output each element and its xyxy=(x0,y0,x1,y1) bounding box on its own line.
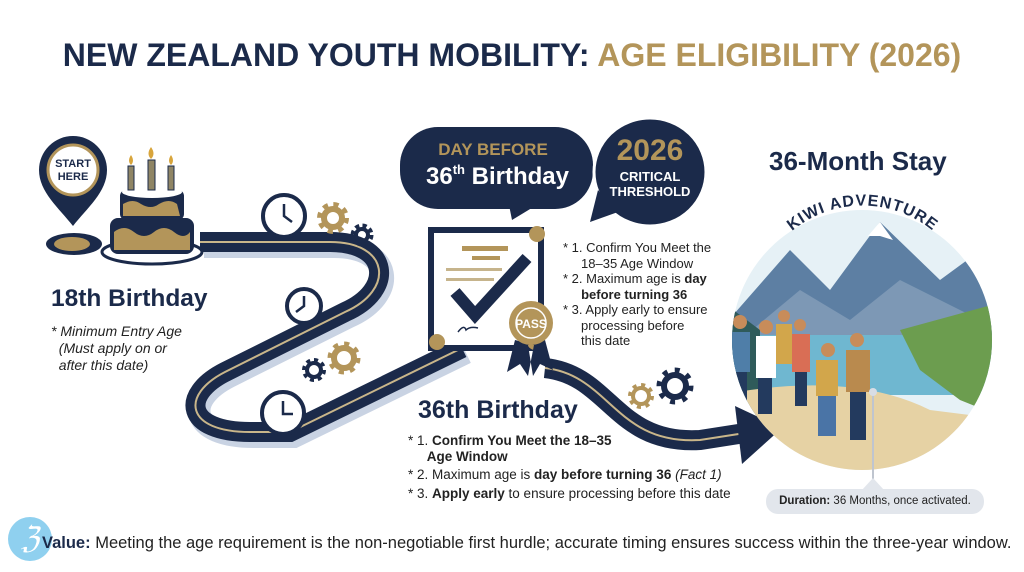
heading: 18th birthday: 18th Birthday xyxy=(51,285,208,312)
callout: day before 36th: 36 xyxy=(426,163,453,190)
text block: minimum entry age xyxy=(51,323,182,373)
text block: right of certificate: * 1. Confirm You Meet the xyxy=(563,240,711,255)
road and icons illustration xyxy=(39,120,992,489)
icon: certificate xyxy=(429,226,553,376)
icon: cake xyxy=(102,147,202,264)
icon: certificate: PASS xyxy=(515,317,547,331)
text block: 36th birthday facts: Age Window xyxy=(427,448,508,464)
callout: 2026 critical threshold: 2026 xyxy=(617,134,683,167)
heading: 36-month stay: 36-Month Stay xyxy=(769,146,947,176)
text block: right of certificate: 18–35 Age Window xyxy=(581,256,693,270)
text block: right of certificate: * 3. Apply early to ensure xyxy=(563,302,708,317)
callout: day before 36th: th xyxy=(453,162,465,177)
callout: day before 36th: DAY BEFORE xyxy=(438,140,548,159)
text block: minimum entry age: * Minimum Entry Age xyxy=(51,323,182,339)
text block: minimum entry age: (Must apply on or xyxy=(59,340,167,356)
callout: day before 36th: Birthday xyxy=(465,163,570,190)
text block: right of certificate: before turning 36 xyxy=(581,286,687,302)
scene: kiwi adventure circle xyxy=(732,194,992,489)
icon: logo xyxy=(8,517,52,561)
icon: start pin xyxy=(39,136,107,255)
text block: right of certificate: this date xyxy=(581,333,630,348)
text block: minimum entry age: after this date) xyxy=(59,357,148,373)
callout: 2026 critical threshold: CRITICAL xyxy=(620,169,680,184)
text block: 36th birthday facts: * 3. Apply early to ensure processing before this date xyxy=(408,486,731,500)
callout: 2026 critical threshold: THRESHOLD xyxy=(610,184,690,199)
road: main xyxy=(195,242,466,437)
footer value statement: Value: Meeting the age requirement is the non-negotiable first hurdle; accurate timing ensures success within the three-year window. xyxy=(42,534,1011,552)
text block: 36th birthday facts xyxy=(408,433,731,501)
callout: duration: Duration: 36 Months, once activated. xyxy=(779,495,971,507)
text block: 36th birthday facts: * 1. Confirm You Meet the 18–35 xyxy=(408,433,612,448)
text block: right of certificate: processing before xyxy=(581,318,684,332)
title: NEW ZEALAND YOUTH MOBILITY: AGE ELIGIBILITY (2026) xyxy=(63,37,961,73)
icon: start pin: START xyxy=(55,158,91,170)
callout: 2026 critical threshold xyxy=(590,118,706,226)
text block: right of certificate xyxy=(563,240,711,348)
scene: kiwi adventure circle: KIWI ADVENTURE xyxy=(786,194,938,230)
callout: duration xyxy=(766,489,984,514)
heading: 36th birthday: 36th Birthday xyxy=(418,396,578,424)
icon: clocks xyxy=(262,195,321,434)
icon: gears xyxy=(304,205,691,407)
text block: right of certificate: * 2. Maximum age is day xyxy=(563,271,707,286)
icon: logo: ℨ xyxy=(21,522,39,555)
icon: start pin: HERE xyxy=(58,171,88,183)
callout: day before 36th xyxy=(400,127,593,220)
text block: 36th birthday facts: * 2. Maximum age is day before turning 36 (Fact 1) xyxy=(408,467,722,482)
road: to stay with arrow xyxy=(545,368,782,464)
